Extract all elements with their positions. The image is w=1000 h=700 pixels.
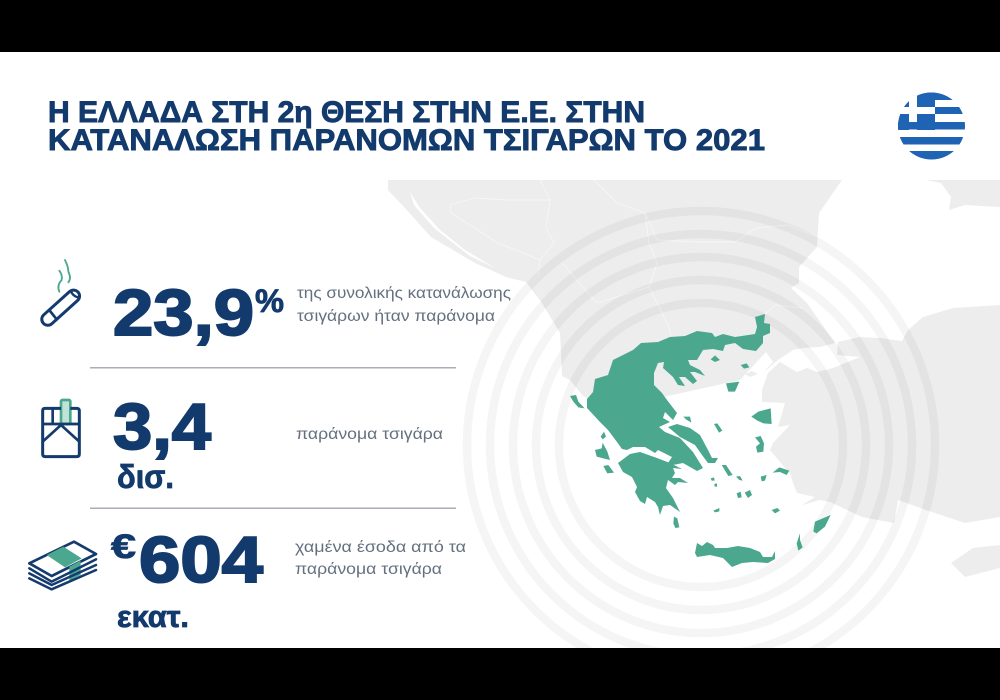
bottom letterbox bar <box>0 648 1000 700</box>
Crete <box>695 542 775 567</box>
title: ΚΑΤΑΝΑΛΩΣΗ ΠΑΡΑΝΟΜΩΝ ΤΣΙΓΑΡΩΝ ΤΟ 2021 <box>48 124 765 157</box>
icon: cigarette pack <box>43 400 79 457</box>
divider <box>90 508 456 509</box>
description: χαμένα έσοδα από τα <box>295 539 466 556</box>
icon: Greek flag <box>898 92 965 160</box>
islands <box>570 355 831 551</box>
mainland <box>587 314 770 471</box>
icon: cigarette <box>39 260 82 328</box>
description: τσιγάρων ήταν παράνομα <box>297 308 495 325</box>
concentric rings <box>467 211 935 679</box>
description: παράνομα τσιγάρα <box>296 426 443 443</box>
percent sign: % <box>255 283 284 319</box>
stat: 604 million euro <box>29 523 466 634</box>
unit: εκατ. <box>117 599 189 634</box>
top letterbox bar <box>0 0 1000 52</box>
title <box>48 96 765 157</box>
Evia <box>668 424 718 463</box>
value: 3,4 <box>113 390 211 463</box>
background map of the region <box>388 180 1000 577</box>
map of Greece <box>570 314 831 567</box>
Peloponnese <box>618 452 688 515</box>
value: 23,9 <box>113 276 254 349</box>
unit: δισ. <box>117 458 174 495</box>
euro sign: € <box>111 528 136 566</box>
title: Η ΕΛΛΑΔΑ ΣΤΗ 2η ΘΕΣΗ ΣΤΗΝ Ε.Ε. ΣΤΗΝ <box>48 96 645 129</box>
description <box>295 539 466 578</box>
value: 604 <box>139 523 263 596</box>
description: παράνομα τσιγάρα <box>295 561 442 578</box>
stat: 23,9 percent <box>39 260 511 349</box>
icon: stack of banknotes <box>29 542 96 589</box>
divider <box>90 367 456 368</box>
description: της συνολικής κατανάλωσης <box>297 285 511 302</box>
stat: 3,4 billion <box>43 390 443 495</box>
description <box>297 285 511 325</box>
